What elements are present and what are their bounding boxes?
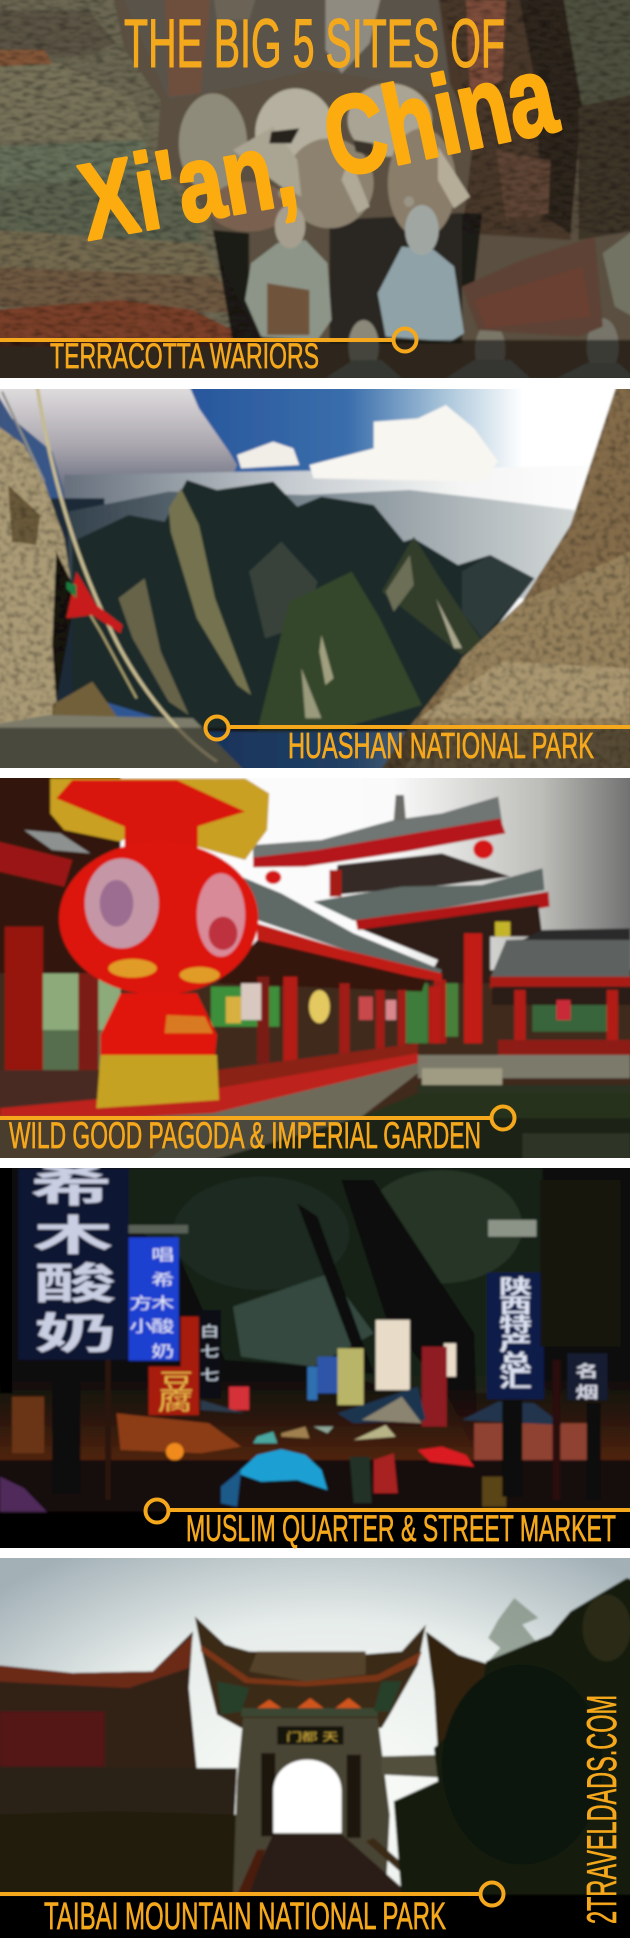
panel: Wild Goose Pagoda photo [0, 770, 630, 1163]
left wing building [0, 1631, 237, 1841]
ledge [0, 714, 244, 768]
title: Xi'an, China: Xi'an, [71, 106, 305, 263]
credit: 2traveldads.com: 2TRAVELDADS.COM [578, 1695, 625, 1924]
warriors [245, 187, 630, 378]
red and neon signs [149, 1310, 456, 1427]
honeycomb stone wall [0, 1811, 237, 1895]
caption shade band [0, 728, 630, 774]
right blue sign: 产 [499, 1332, 532, 1354]
stairs [237, 1834, 438, 1895]
gate roof [195, 1616, 426, 1728]
label: Terracotta Wariors with connector: TERRACOTTA WARIORS [50, 337, 319, 376]
corridor roof and pillars [217, 877, 442, 1070]
label: Taibai Mountain National Park with connector [0, 1882, 504, 1938]
second blue sign: 奶 [151, 1344, 174, 1360]
dark trench [213, 213, 482, 343]
red and neon signs: 七 [200, 1367, 219, 1383]
ropes and ribbon [2, 385, 217, 762]
red and neon signs: 七 [200, 1344, 219, 1360]
giant red lantern [50, 778, 269, 1108]
big blue LED sign: 酸 [34, 1260, 117, 1307]
big blue LED sign: 奶 [34, 1310, 117, 1357]
left dark red structure [0, 770, 121, 1113]
caption shade band [0, 1118, 630, 1158]
gate body: 天 [322, 1731, 339, 1743]
label: Terracotta Wariors with connector [0, 328, 416, 376]
title: Xi'an, China [71, 31, 566, 263]
right wing [382, 1631, 490, 1778]
red and neon signs: 豆 [159, 1370, 194, 1395]
right rock and figure [462, 227, 630, 337]
right blue sign: 汇 [499, 1369, 532, 1391]
warm street glow [0, 1376, 630, 1462]
right blue sign: 特 [499, 1313, 532, 1336]
pond [216, 1094, 630, 1158]
pillars at left [0, 1160, 111, 1500]
second blue sign: 希 [151, 1272, 174, 1289]
trees at right [394, 1578, 630, 1901]
second blue sign: 唱 [151, 1247, 174, 1264]
gate body: 门 [286, 1731, 302, 1743]
clouds [0, 389, 508, 506]
gate body [233, 1718, 390, 1895]
right blue sign: 烟 [575, 1384, 599, 1401]
panel: Taibai Mountain photo [0, 1555, 630, 1938]
right rock [378, 385, 630, 775]
far ridge [68, 490, 575, 598]
upper pagoda roof [253, 795, 510, 897]
caption band [0, 1895, 630, 1938]
label: Wild Good Pagoda and Imperial Garden with connector [0, 1106, 514, 1156]
rock texture [0, 382, 630, 775]
horses [179, 83, 470, 238]
right wing [490, 928, 630, 1055]
dark backdrop behind rope [50, 497, 106, 704]
tree canopy [128, 1168, 544, 1422]
left earth strata [0, 0, 265, 347]
caption shade band [0, 339, 630, 378]
red and neon signs: 白 [200, 1324, 219, 1340]
upper centre and right rock [121, 0, 630, 240]
panel: Huashan National Park photo [0, 382, 630, 775]
panel: Muslim Quarter street market photo [0, 1160, 630, 1553]
big blue LED sign: 希 [30, 1164, 112, 1211]
right blue sign [487, 1180, 621, 1401]
second blue sign: 方 [129, 1295, 153, 1312]
left rock [0, 422, 121, 732]
small lanterns [226, 840, 571, 1023]
second blue sign: 小 [129, 1319, 153, 1335]
dark mountains [72, 480, 534, 732]
walkway deck and railing [0, 1043, 630, 1160]
big blue LED sign: 木 [33, 1212, 113, 1259]
red and neon signs: 腐 [158, 1390, 193, 1415]
second blue sign: 木 [151, 1295, 175, 1312]
right blue sign: 名 [575, 1364, 599, 1380]
far building lower dark [0, 970, 630, 1120]
right blue sign: 总 [499, 1351, 532, 1373]
right blue sign: 西 [499, 1295, 532, 1317]
big blue LED sign [18, 1164, 129, 1360]
lower pagoda roof [313, 868, 550, 1043]
pale background and trees [40, 970, 609, 1073]
crowd and umbrellas [0, 1360, 630, 1517]
right blue sign: 陕 [499, 1275, 532, 1298]
caption shade band [0, 1512, 630, 1553]
gate body: 都 [301, 1731, 318, 1743]
second blue sign: 酸 [151, 1319, 175, 1335]
rock texture [0, 0, 630, 346]
second blue sign [128, 1225, 188, 1361]
label: Huashan National Park with connector [206, 716, 630, 766]
panel: Terracotta Warriors photo [0, 0, 630, 390]
stall awnings [201, 1387, 563, 1440]
